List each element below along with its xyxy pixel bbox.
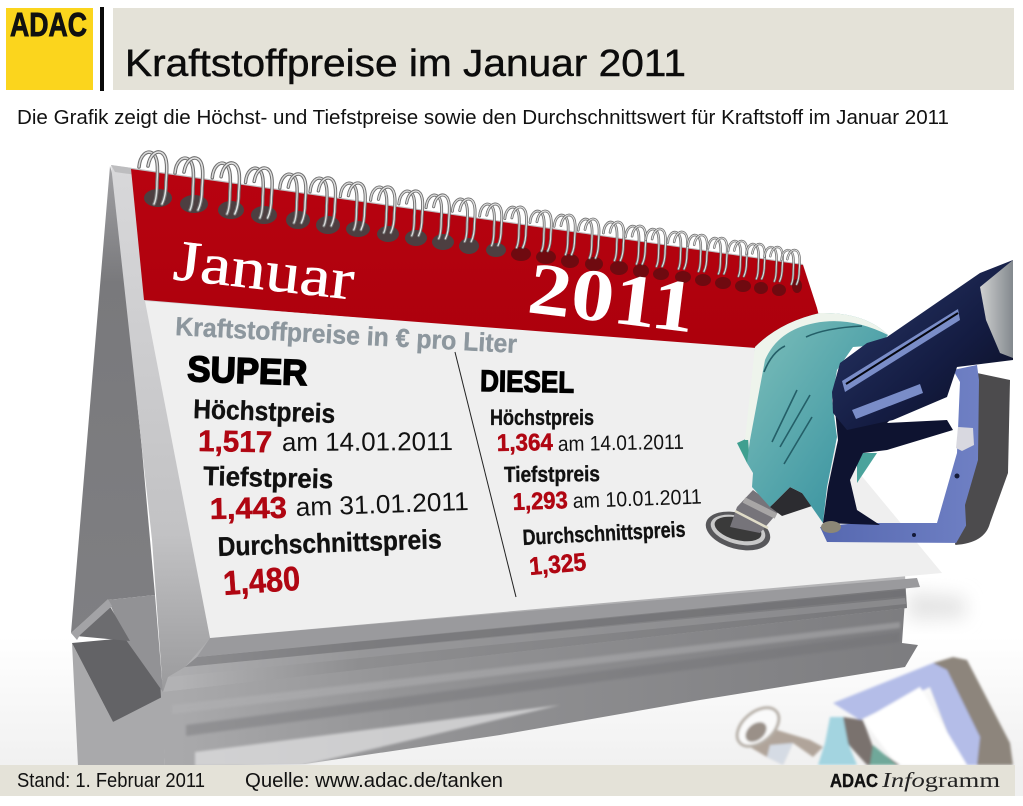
- base fold: [71, 595, 163, 692]
- frame: [111, 165, 907, 692]
- pivot: [821, 521, 841, 533]
- column: Diesel: 1,325: [528, 548, 587, 581]
- column: Super: 1,517: [198, 425, 272, 459]
- icon: fuel nozzle: [701, 260, 1013, 557]
- grey outer guard: [955, 373, 1010, 544]
- column: Diesel: DIESEL: [480, 365, 574, 400]
- spiral binding: [139, 152, 800, 284]
- column: Diesel: Höchstpreis: [490, 405, 594, 430]
- column: Diesel: [480, 365, 702, 581]
- white page: [145, 301, 942, 638]
- logo: ADAC: [6, 6, 93, 90]
- column: Super: 1,443: [210, 492, 287, 526]
- column: Super: 1,480: [222, 560, 301, 603]
- spout ring: [701, 505, 775, 557]
- column: Diesel: Durchschnittspreis: [522, 516, 686, 550]
- punch holes: [144, 189, 506, 257]
- red header: [131, 169, 823, 350]
- column: Super: Tiefstpreis: [203, 461, 334, 494]
- trigger and grip: [823, 410, 953, 525]
- title band: Kraftstoffpreise im Januar 2011: [125, 43, 686, 85]
- column divider: [455, 352, 516, 597]
- teal patch: [857, 453, 877, 483]
- white crest: [745, 313, 888, 440]
- footer band: [0, 765, 1015, 796]
- page heading: Kraftstoffpreise in € pro Liter: [175, 311, 518, 359]
- body grooves: [764, 326, 862, 464]
- footer band: ADAC: [830, 771, 878, 791]
- logo: ADAC: ADAC: [10, 6, 87, 43]
- page stack: [163, 578, 920, 692]
- footer band: Info gramm: [881, 768, 1000, 792]
- column: Diesel: am 10.01.2011: [572, 486, 702, 513]
- year label: 2011: [524, 247, 700, 349]
- column: Super: [187, 348, 469, 603]
- title band: [113, 8, 1014, 90]
- column: Super: Höchstpreis: [193, 394, 336, 429]
- column: Diesel: 1,364: [497, 429, 554, 457]
- month label: Januar: [171, 227, 358, 312]
- subtitle: Die Grafik zeigt die Höchst- und Tiefstpreise sowie den Durchschnittswert für Kraftstoff im Januar 2011: [17, 106, 949, 129]
- metal spout: [730, 490, 780, 533]
- barrel: [832, 260, 1013, 430]
- column: Diesel: Tiefstpreis: [504, 461, 600, 487]
- column: Super: Durchschnittspreis: [217, 524, 442, 562]
- reflection of calendar: [72, 600, 918, 766]
- column: Super: am 14.01.2011: [282, 426, 453, 457]
- calendar: [71, 152, 942, 692]
- column: Diesel: am 14.01.2011: [558, 431, 684, 456]
- column: Diesel: 1,293: [512, 487, 568, 516]
- column: Super: SUPER: [187, 348, 308, 393]
- reflection of nozzle: [730, 657, 1013, 765]
- footer band: Stand: 1. Februar 2011: [17, 770, 205, 792]
- teal flange: [737, 438, 750, 465]
- rear support: [71, 166, 155, 633]
- dark spout collar: [770, 487, 815, 516]
- blue guard: [820, 365, 979, 543]
- silver collar: [980, 260, 1013, 358]
- header divider bar: [100, 7, 104, 91]
- column: Super: am 31.01.2011: [295, 486, 469, 522]
- teal body: [747, 313, 888, 523]
- footer band: Quelle: www.adac.de/tanken: [245, 770, 503, 792]
